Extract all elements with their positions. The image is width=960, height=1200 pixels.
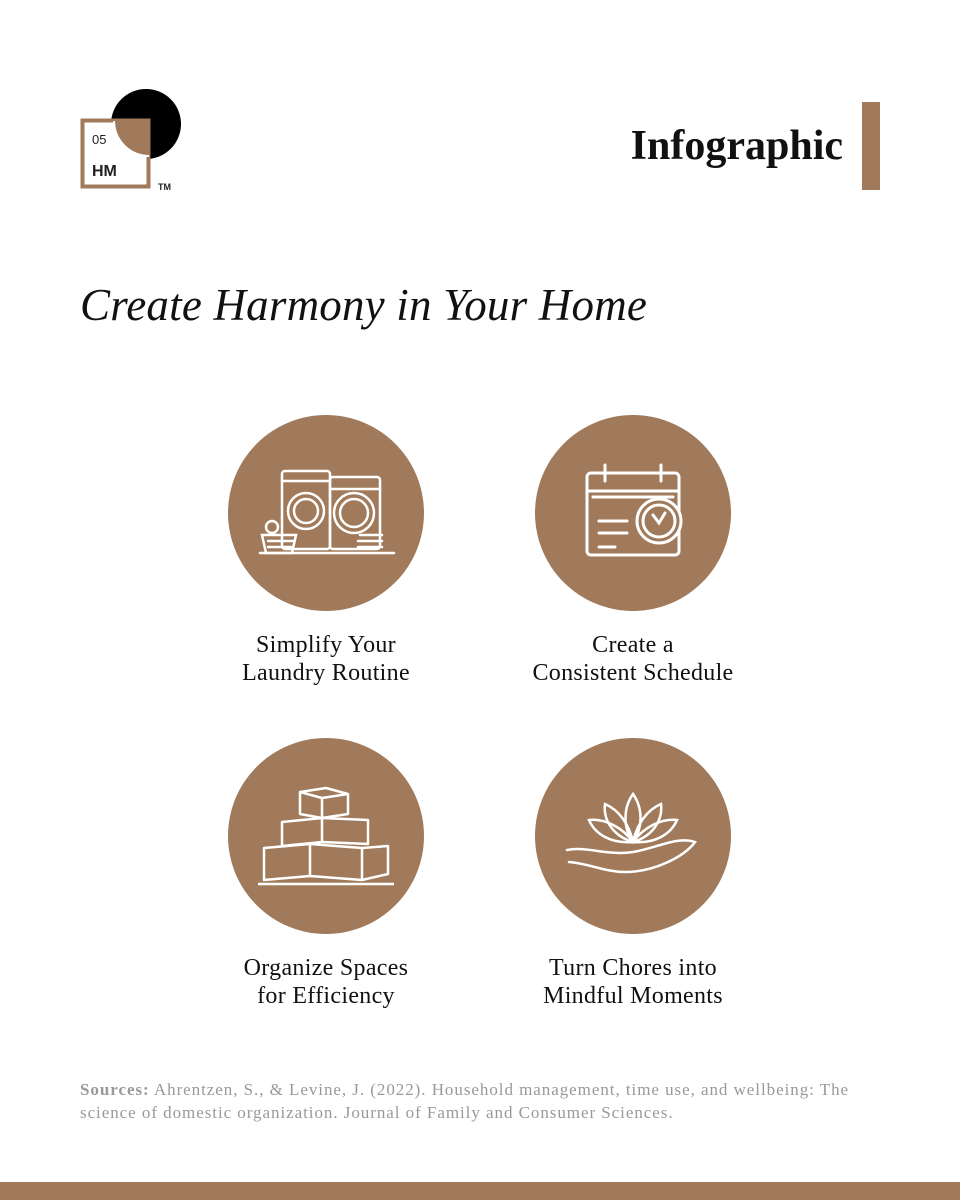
label: Mindful Moments	[543, 983, 723, 1009]
logo: 05	[92, 132, 106, 147]
icon: boxes	[228, 738, 424, 934]
item: mindful	[535, 738, 731, 1009]
sources: Sources: Ahrentzen, S., & Levine, J. (2022). Household management, time use, and wellbeing: The	[80, 1080, 849, 1099]
label	[543, 955, 723, 1009]
label	[532, 632, 734, 686]
icon: lotus in hand	[535, 738, 731, 934]
icon: washing machines	[228, 415, 424, 611]
sources: science of domestic organization. Journal of Family and Consumer Sciences.	[80, 1103, 674, 1122]
title: Infographic: Infographic	[631, 123, 843, 169]
footer bar	[0, 1182, 960, 1200]
logo: TM	[158, 182, 171, 192]
label: Turn Chores into	[549, 955, 717, 981]
label: Laundry Routine	[242, 660, 410, 686]
icon: calendar clock	[535, 415, 731, 611]
item: schedule	[532, 415, 734, 686]
logo: HM	[92, 163, 117, 180]
label: Create a	[592, 632, 674, 658]
label: for Efficiency	[257, 983, 395, 1009]
label	[242, 632, 410, 686]
label: Organize Spaces	[244, 955, 408, 981]
label: Simplify Your	[256, 632, 396, 658]
logo	[80, 89, 181, 192]
label: Consistent Schedule	[532, 660, 734, 686]
label	[244, 955, 408, 1009]
heading: Create Harmony in Your Home	[80, 280, 647, 330]
item: laundry	[228, 415, 424, 686]
sources	[80, 1080, 849, 1122]
item: organize	[228, 738, 424, 1009]
accent bar	[862, 102, 880, 190]
